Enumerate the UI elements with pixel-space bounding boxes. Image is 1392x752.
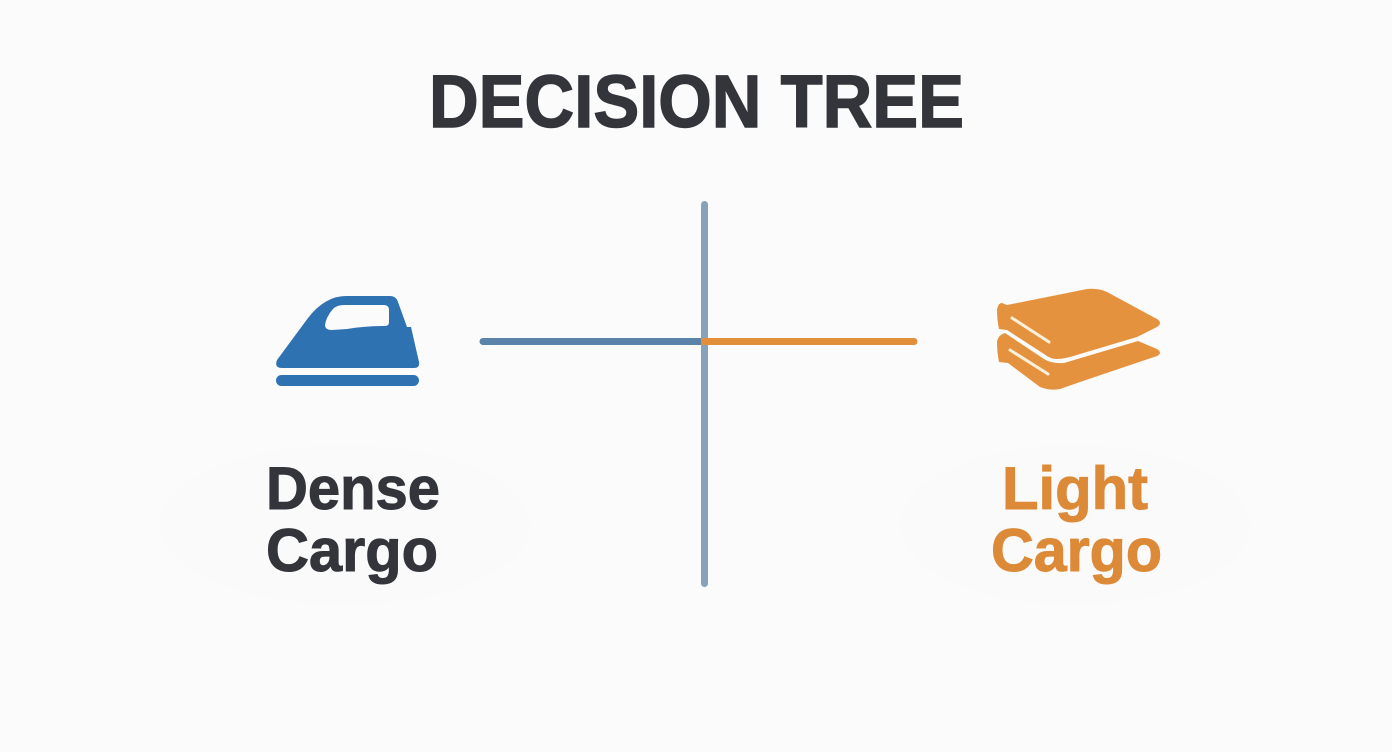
- label: light cargo: Light: [1002, 455, 1148, 522]
- icon: clothes iron (dense cargo): [276, 296, 419, 386]
- label: dense cargo: Dense: [266, 455, 440, 522]
- title: DECISION TREE: [429, 60, 964, 143]
- right branch line: [701, 338, 918, 345]
- label: light cargo: Cargo: [991, 517, 1162, 584]
- vertical trunk line: [701, 201, 708, 587]
- label: dense cargo: [266, 455, 440, 584]
- label: light cargo: [991, 455, 1162, 584]
- label: dense cargo: Cargo: [266, 517, 438, 584]
- icon: folded fabric (light cargo): [997, 289, 1160, 390]
- decision tree connector lines: [480, 201, 918, 587]
- left branch line: [480, 338, 701, 345]
